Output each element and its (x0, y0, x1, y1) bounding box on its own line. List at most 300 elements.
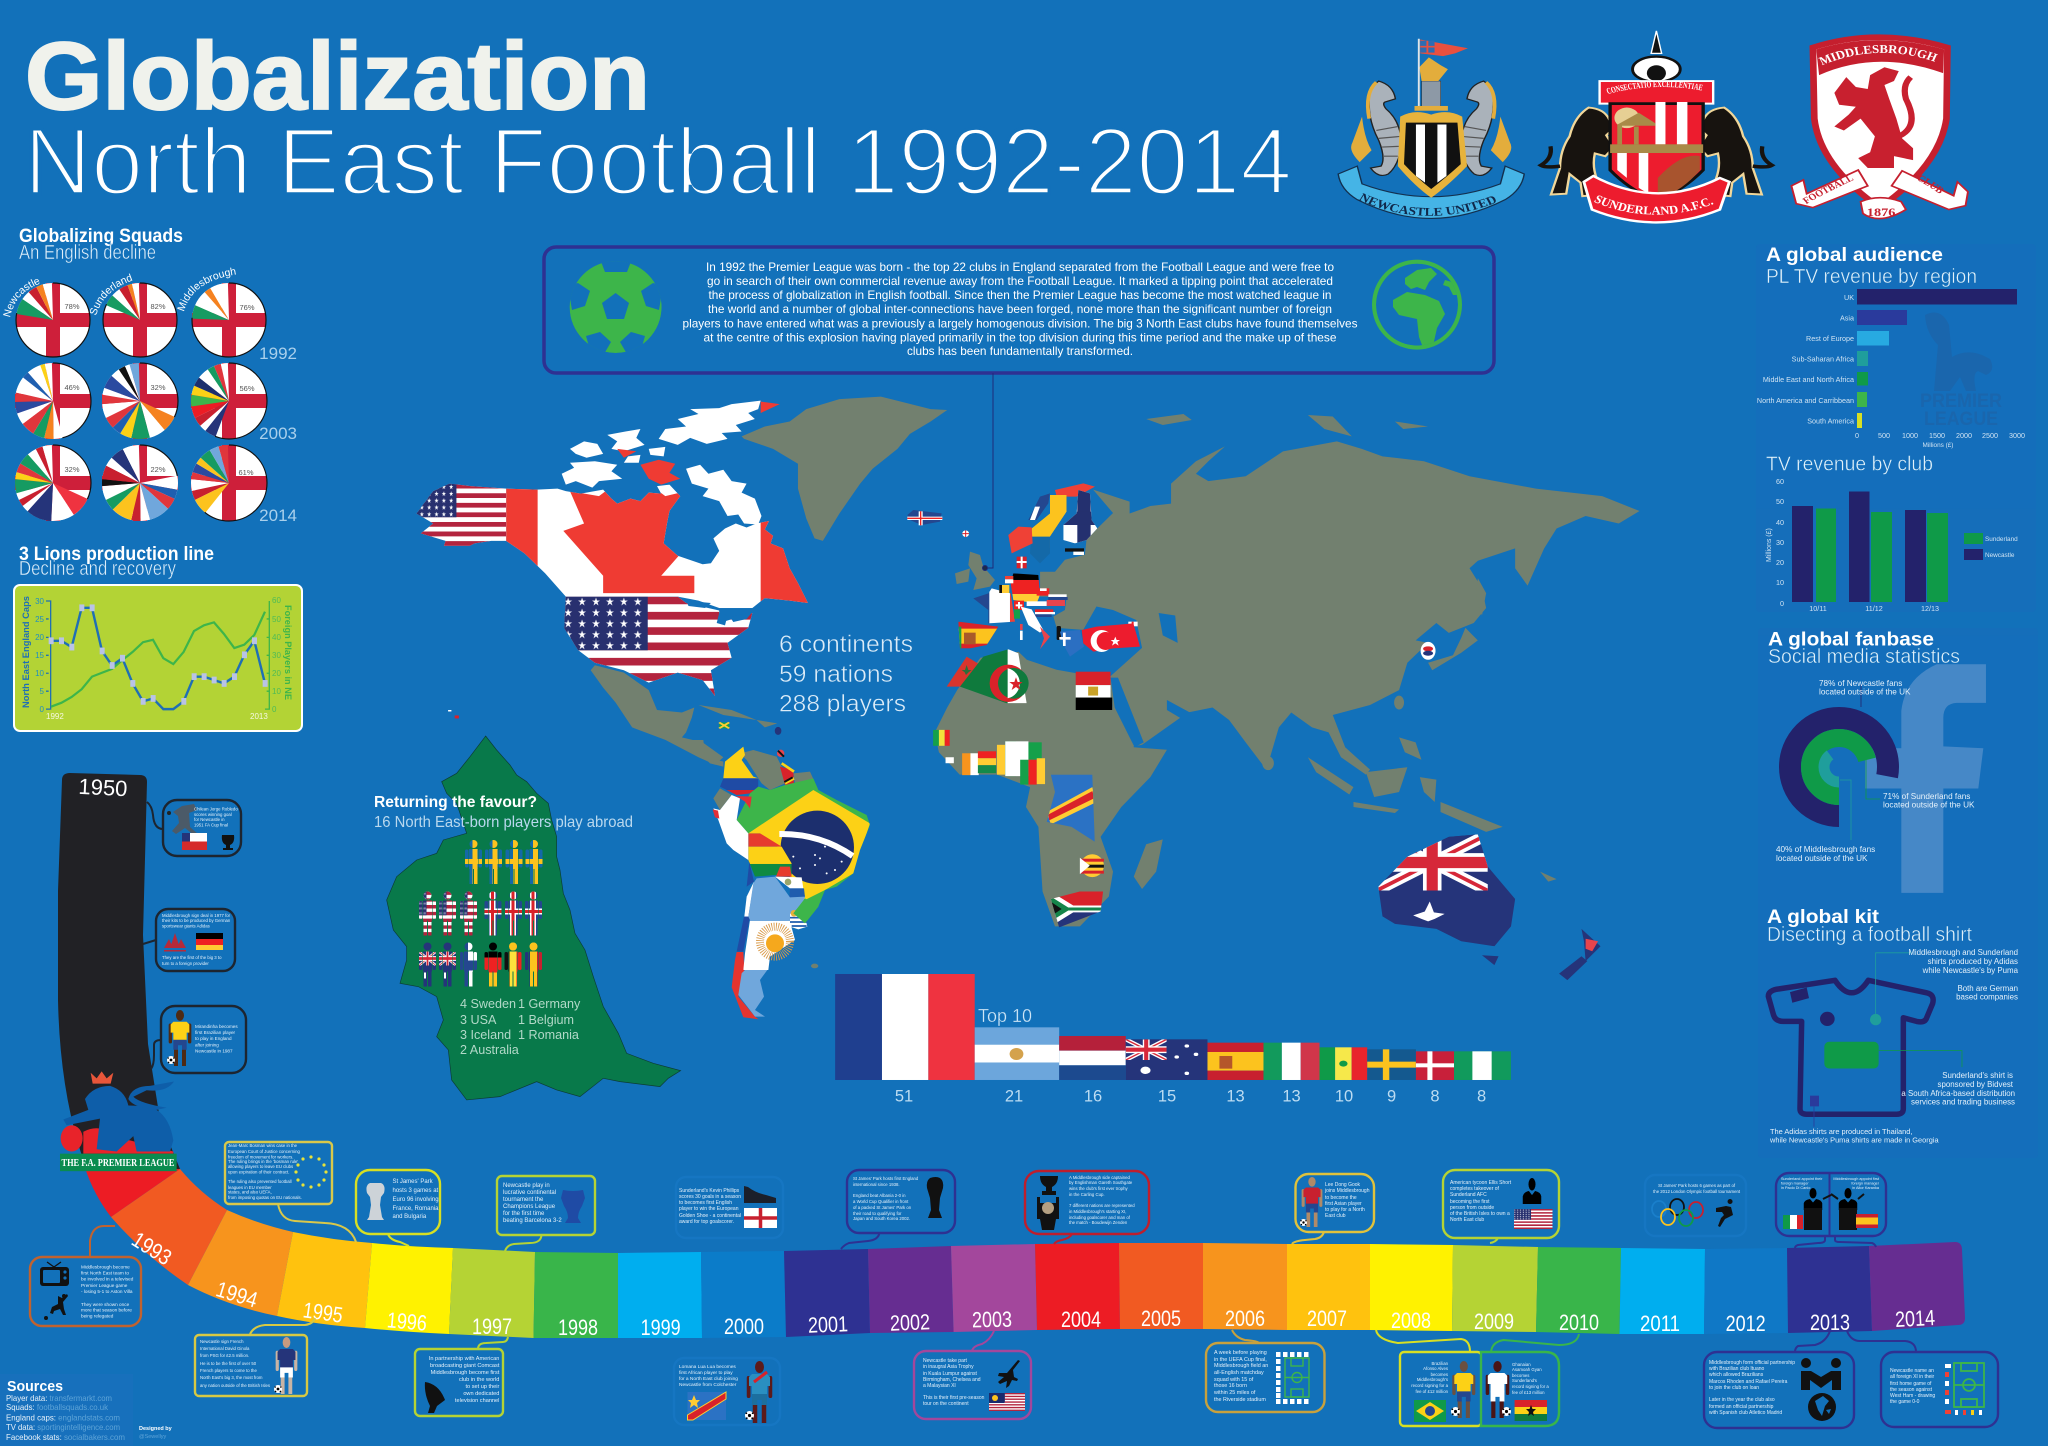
panel: A global kit: while Newcastle's Puma shirts are made in Georgia (1769, 1136, 1939, 1144)
bar chart: TV revenue by region: Sub-Saharan Africa (1792, 354, 1854, 364)
bar chart: TV revenue by region: North America and Carribbean (1757, 396, 1854, 405)
bar chart: TV revenue by club: 30 (1776, 538, 1784, 547)
kit labels: a South Africa-based distribution (1901, 1089, 2015, 1098)
ribbon: year labels: 2013 (1810, 1310, 1850, 1335)
list of countries (460, 997, 581, 1057)
ribbon: coloured year bands (85, 1168, 1965, 1338)
central Europe flags (999, 576, 1138, 657)
chart axis labels: 10 (35, 669, 45, 678)
callout: 1977 Adidas: Middlesbrough sign deal in 1977 for (162, 913, 231, 918)
ribbon: year labels: 1997 (472, 1314, 512, 1339)
kit labels: shirts produced by Adidas (1928, 957, 2018, 966)
callout: Asamoah Gyan: Asamoah Gyan (1512, 1367, 1542, 1372)
panel: 3 Lions production line: 0 (272, 705, 277, 714)
panel: Top 10 countries (835, 974, 1511, 1106)
callout: 1995 Bosman ruling: The ruling also prevented football (228, 1179, 292, 1184)
callout: 1995 Bosman ruling: The ruling brings in the 'bosman rule' (228, 1159, 298, 1164)
kit labels: Sunderland's shirt is (1942, 1071, 2013, 1080)
bar chart: TV revenue by region: 3000 (2009, 431, 2025, 440)
callout: 1993 first televised game: first North East team to (81, 1270, 129, 1275)
callout: Asamoah Gyan: record signing for a (1512, 1384, 1549, 1389)
ribbon: year labels: 2011 (1640, 1311, 1680, 1336)
sources: England caps: englandstats.com (6, 1413, 120, 1423)
panel: Globalizing Squads: An English decline (19, 242, 156, 264)
callout: Kevin Phillips: Sunderland's Kevin Phillips (679, 1188, 740, 1194)
pie: Middlesbrough 1992 (192, 283, 266, 357)
callout: Kevin Phillips: Golden Shoe - a continental (679, 1213, 741, 1219)
list of countries: 2 Australia (460, 1043, 519, 1057)
callout: 2003 Asia Trophy: in inaugral Asia Trophy (923, 1364, 974, 1370)
bar chart: TV revenue by region: Rest of Europe (1806, 334, 1854, 343)
callout: 1993 first televised game: They were shown once (81, 1302, 130, 1307)
ribbon: year labels (78, 774, 1936, 1340)
panel: Returning the favour (374, 736, 681, 1100)
pie: Newcastle 1992: 78% (64, 302, 80, 311)
kit labels: services and trading business (1911, 1098, 2015, 1107)
flag: Egypt (1076, 672, 1112, 710)
callout: Ellis Short: American tycoon Ellis Short (1450, 1180, 1512, 1186)
kit labels: Both are German (1957, 984, 2018, 993)
bar chart: TV revenue by region: 2000 (1956, 431, 1972, 440)
pie: Sunderland 2014: 22% (150, 465, 166, 474)
callout: 1951 Robledo: scores winning goal (194, 812, 232, 817)
panel: A global kit (1767, 907, 2019, 1144)
crest: Newcastle United (1337, 38, 1525, 219)
panel: Top 10 countries: Top 10 (978, 1006, 1032, 1026)
ribbon: year labels: 1995 (301, 1297, 344, 1328)
callout: 1993 first televised game (30, 1226, 141, 1326)
sources: Squads: footballsquads.co.uk (6, 1402, 109, 1412)
callout: 2013 Brazilian and Spanish partnerships: with Spanish club Atletico Madrid (1709, 1410, 1782, 1416)
callout: 2013 foreign managers: Middlesbrough appoint first (1833, 1177, 1880, 1181)
ribbon: year labels: 2008 (1391, 1308, 1431, 1333)
callout: Euro 96: France, Romania (392, 1206, 439, 1212)
callout: Champions League: tournament the (503, 1197, 544, 1203)
ribbon: year labels: 1993 (127, 1227, 176, 1270)
callout: 2013 Brazilian and Spanish partnerships: Later in the year the club also (1709, 1397, 1775, 1403)
callout: 2006 all-English squad: squad with 15 of (1214, 1377, 1254, 1383)
flag: Spain (958, 622, 998, 648)
callout: Asamoah Gyan: Sunderland's (1512, 1378, 1537, 1383)
panel: A global audience: PL TV revenue by region (1766, 266, 1977, 288)
callout: 1977 Adidas: sportswear giants Adidas (162, 924, 210, 928)
donut chart (1790, 718, 1888, 816)
callout: 2003 Asia Trophy: Birmingham, Chelsea and (923, 1377, 981, 1383)
flag values: 51 (895, 1088, 913, 1106)
panel: 3 Lions production line: Decline and recovery (19, 558, 176, 580)
season labels: 2003 (259, 424, 297, 443)
callout: 1993 first televised game: Middlesbrough become (81, 1264, 130, 1269)
callout: Afonso Alves: fee of £12 million (1416, 1389, 1449, 1394)
panel: A global kit: A global kit (1767, 907, 1880, 928)
flag bars (835, 974, 1511, 1080)
flag values: 16 (1084, 1088, 1102, 1106)
callout: Lee Dong Gook: East club (1325, 1213, 1346, 1219)
ribbon: year labels: 1996 (386, 1307, 428, 1336)
flag: Turkey (1082, 624, 1140, 652)
bar chart: TV revenue by region: 1500 (1929, 431, 1945, 440)
crest: Middlesbrough FC: FOOTBALL (1802, 176, 1854, 204)
watermark: Premier League lion (1920, 313, 2002, 430)
callout: 2013 Brazilian and Spanish partnerships (1704, 1331, 1854, 1428)
callout: 2003 Asia Trophy: Newcastle take part (923, 1358, 968, 1364)
callout: 1995 Bosman ruling: states, and also UEFA, (228, 1190, 272, 1194)
bar chart: TV revenue by region: 1000 (1902, 431, 1918, 440)
callout: 2001 St James' Park international: a World Cup Qualifier in front (853, 1199, 909, 1204)
flag: Morocco (947, 657, 983, 687)
donut labels: located outside of the UK (1776, 854, 1868, 863)
callout: Ginola: from PSG for £2.5 million. (200, 1353, 249, 1358)
title: North East Football 1992-2014 (24, 109, 1292, 215)
pie: Middlesbrough 2014 (191, 445, 267, 521)
callout: 1995 Bosman ruling: allowing players to leave EU clubs (228, 1164, 293, 1169)
flag: Peru (713, 795, 752, 860)
sources: TV data: sportingintelligence.com (6, 1422, 120, 1432)
callout: 2013 foreign managers: foreign manager (1851, 1182, 1880, 1186)
list of countries: 3 Iceland (460, 1028, 511, 1042)
ribbon: year labels: 1999 (641, 1315, 681, 1340)
Iceland (907, 510, 969, 537)
club crests (1337, 30, 1969, 224)
callout: Ellis Short (1443, 1170, 1559, 1243)
callout: 2003 Asia Trophy (914, 1331, 1031, 1419)
designer credit: Designed by (139, 1426, 173, 1432)
grey land north (690, 740, 818, 968)
callout: 1977 Adidas: their kits to be produced by German (162, 918, 231, 923)
crest: Middlesbrough FC: 1876 (1867, 205, 1896, 219)
callout: 2014 all-foreign XI: first home game of (1890, 1381, 1932, 1387)
crest: Sunderland AFC: CONSECTATIO EXCELLENTIAE (1606, 82, 1703, 94)
callout: Champions League: beating Barcelona 3-2 (503, 1218, 562, 1224)
callout lines (1840, 684, 1880, 840)
callout: Ginola: International David Ginola (200, 1346, 250, 1351)
ribbon: year labels: 2012 (1726, 1311, 1766, 1336)
flag: France (974, 588, 1015, 624)
callout: 1987 Mirandinha: Newcastle in 1987 (195, 1049, 233, 1054)
callout: Lomana LuaLua: Newcastle from Colchester (679, 1382, 737, 1388)
pie: Sunderland 1992 (103, 283, 177, 357)
ribbon: year labels: 2004 (1061, 1307, 1101, 1332)
ribbon: year labels: 2003 (972, 1307, 1012, 1332)
callout: 2013 Brazilian and Spanish partnerships: Middlesbrough form official partnership (1709, 1360, 1795, 1366)
intro text: go in search of their own commercial revenue away from the Football League. It marked a tipping point that accelerated (707, 275, 1333, 288)
callout: Comcast: Middlesbrough become first (431, 1370, 500, 1376)
icon: football (568, 259, 663, 354)
callout: Ginola: French players to come to the (200, 1368, 257, 1373)
bar chart: TV revenue by club (1766, 477, 2018, 613)
chart axis labels: 15 (35, 651, 45, 660)
callout: Ginola: North East's big 3, the most from (200, 1375, 263, 1380)
callout: 1977 Adidas (143, 909, 235, 971)
callout: 2013 foreign managers: in Aitor Karanka (1852, 1186, 1880, 1190)
callout: 1987 Mirandinha: first Brazilian player (195, 1030, 236, 1035)
callout: 2001 St James' Park international: international since 1938. (853, 1182, 900, 1187)
callout: 2003 Asia Trophy: This is their first pre-season (923, 1395, 985, 1401)
callout: Champions League: Champions League (503, 1204, 556, 1210)
small flags: Africa (933, 730, 1045, 785)
pie: Sunderland 1992: 82% (150, 302, 166, 311)
panel: 3 Lions production line: North East England Caps (21, 596, 31, 708)
chart axis labels: 25 (35, 615, 45, 624)
pie: Newcastle 1992 (16, 283, 90, 357)
callout: Kevin Phillips: scores 30 goals in a season (679, 1194, 741, 1200)
flag: South Africa (1051, 892, 1103, 928)
flags: South America (690, 740, 873, 1019)
callout: 2013 Brazilian and Spanish partnerships: to join the club on loan (1709, 1385, 1759, 1391)
callout: 1987 Mirandinha: to play in England (195, 1036, 232, 1041)
ribbon: year labels: 2007 (1307, 1306, 1347, 1331)
donut labels (1776, 679, 1975, 863)
callout: 2006 all-English squad: all-English matchday (1214, 1370, 1264, 1376)
callout: 2006 all-English squad: the Riverside stadium (1214, 1397, 1266, 1403)
flag: Uruguay (790, 910, 807, 929)
flag values: 15 (1158, 1088, 1176, 1106)
intro text: the process of globalization in English football. Since then the Premier League has become the most watched league in (708, 289, 1332, 302)
crest: Sunderland AFC: SUNDERLAND A.F.C. (1594, 196, 1714, 215)
callout: Comcast: own dedicated (463, 1391, 499, 1397)
bar chart: TV revenue by region: South America (1807, 416, 1854, 426)
flag values: 13 (1226, 1088, 1245, 1106)
callout: 2013 Brazilian and Spanish partnerships: with Brazilian club Ituano (1709, 1366, 1765, 1372)
flag: Paraguay (775, 867, 805, 898)
chart axis labels (35, 597, 45, 714)
list of countries: 4 Sweden (460, 997, 516, 1011)
callout: 2014 all-foreign XI: West Ham - drawing (1890, 1393, 1935, 1399)
panel: A global kit: The Adidas shirts are produced in Thailand, (1770, 1127, 1912, 1136)
logo: F.A. Premier League lion (60, 1071, 177, 1171)
callout: 2004 Carling Cup: including goalscorer and man of (1069, 1215, 1131, 1220)
shirt diagram (1768, 953, 1962, 1127)
bar chart: TV revenue by club: 0 (1780, 599, 1784, 608)
bar chart: TV revenue by region: 2500 (1982, 431, 1998, 440)
flag: Brazil (733, 777, 873, 927)
callout: 2001 St James' Park international: England beat Albania 2-0 in (853, 1193, 906, 1198)
bar chart: TV revenue by club: Newcastle (1985, 552, 2015, 559)
panel: 3 Lions production line: 30 (272, 651, 281, 660)
callout: 2013 foreign managers: in Paolo Di Canio (1781, 1186, 1810, 1190)
pie: Middlesbrough 1992: 76% (239, 303, 255, 312)
panel: 3 Lions production line: 2013 (250, 712, 268, 721)
panel: A global fanbase (1768, 630, 1986, 893)
callout: Lee Dong Gook: to play for a North (1325, 1207, 1365, 1213)
callout: Lee Dong Gook: first Asian player (1325, 1201, 1362, 1207)
great lakes (686, 601, 752, 625)
map statistics (779, 631, 913, 718)
pictogram: players by country (419, 840, 542, 986)
intro text: In 1992 the Premier League was born - the top 22 clubs in England separated from the Football League and were free to (706, 261, 1334, 274)
flag values (895, 1088, 1486, 1106)
bar chart: TV revenue by club: 10 (1776, 578, 1784, 587)
callout: 1987 Mirandinha: Mirandinha becomes (195, 1024, 238, 1029)
timeline ribbon (58, 773, 1965, 1340)
callout: Ellis Short: of the British Isles to own a (1450, 1211, 1510, 1217)
Nordic flags (1008, 483, 1100, 568)
callout: 1951 Robledo: 1951 FA Cup final (194, 822, 228, 828)
callout: 1951 Robledo: Chilean Jorge Robledo (194, 806, 238, 811)
callout: 2006 all-English squad: Middlesbrough field an (1214, 1363, 1268, 1369)
flag: Algeria (958, 647, 1029, 705)
callout: 2014 all-foreign XI (1847, 1331, 1998, 1427)
callout: Ellis Short: completes takeover of (1450, 1186, 1500, 1192)
pie: Middlesbrough 2003 (191, 363, 267, 439)
flag: Alaska USA (412, 484, 512, 546)
callout: 2013 foreign managers (1776, 1173, 1886, 1248)
list of countries: 1 Belgium (518, 1013, 574, 1027)
season labels: 2014 (259, 506, 297, 525)
line chart (46, 601, 269, 709)
pie: Newcastle 2003: 46% (64, 383, 80, 392)
flag values: 13 (1282, 1088, 1301, 1106)
logo: F.A. Premier League lion: THE F.A. PREMIER LEAGUE (62, 1158, 175, 1169)
ribbon: year labels: 2014 (1894, 1305, 1936, 1332)
flag: Australia (1378, 834, 1515, 946)
bar chart: TV revenue by region: Millions (£) (1923, 442, 1953, 449)
callout: 1993 first televised game: being relegated (81, 1314, 114, 1319)
callout: 2004 Carling Cup: in the Carling Cup. (1069, 1192, 1105, 1197)
callout: 1987 Mirandinha: after joining (195, 1042, 219, 1048)
panel: A global kit: Disecting a football shirt (1767, 924, 1972, 946)
callout: Champions League: for the first time (503, 1211, 545, 1217)
watermark: Facebook f (1865, 664, 1986, 893)
callout: 2014 all-foreign XI: Newcastle name an (1890, 1368, 1934, 1374)
callout: 1987 Mirandinha (151, 1006, 246, 1073)
callout: Euro 96: Euro 96 involving (392, 1197, 439, 1203)
callout: Afonso Alves (1376, 1330, 1481, 1426)
flag: DR Congo (1046, 774, 1095, 842)
bar chart: TV revenue by region: UK (1844, 293, 1854, 302)
callout: 1995 Bosman ruling: Jean-Marc Bosman wins case in the (228, 1143, 298, 1148)
callout: 1977 Adidas: turn to a foreign provider (162, 961, 209, 966)
callout: Afonso Alves: Afonso Alves (1423, 1366, 1448, 1371)
callout: Afonso Alves: Brazilian (1432, 1361, 1449, 1366)
kit labels (1901, 948, 2019, 1107)
ribbon: year labels: 1998 (558, 1315, 598, 1340)
callout: 2004 Carling Cup: A Middlesbrough side captained (1069, 1175, 1131, 1180)
callout: Afonso Alves: record signing for a (1411, 1383, 1449, 1388)
callout: 1993 first televised game: - losing 5-1 to Aston Villa (81, 1289, 133, 1294)
panel: 3 Lions production line: 50 (272, 615, 281, 624)
callout: Ginola (195, 1318, 315, 1396)
chart axis labels: 20 (35, 633, 45, 642)
callout: Lomana LuaLua: Lomana Lua Lua becomes (679, 1364, 736, 1370)
callout: Champions League: lucrative continental (503, 1190, 556, 1196)
callout: 2003 Asia Trophy: in Kuala Lumpur against (923, 1371, 978, 1377)
callout: Asamoah Gyan: becomes (1512, 1373, 1529, 1378)
callout: 2013 foreign managers: Sunderland appoint their (1781, 1177, 1823, 1181)
callout: 2014 all-foreign XI: the game 0-0 (1890, 1399, 1920, 1405)
callout: Kevin Phillips: player to win the European (679, 1206, 739, 1212)
callout: 1977 Adidas: They are the first of the big 3 to (162, 955, 222, 960)
callout: 2012 Olympics: St James' Park hosts 6 games as part of (1658, 1183, 1736, 1188)
bar chart: TV revenue by club: 12/13 (1921, 604, 1939, 613)
ribbon: year labels: 2002 (890, 1309, 930, 1336)
callout: 2013 Brazilian and Spanish partnerships: which allowed Brazilians (1709, 1372, 1764, 1378)
title (24, 23, 1292, 215)
icon: globe (1372, 260, 1462, 353)
panel: Globalizing Squads: Globalizing Squads (19, 226, 183, 247)
callout: 2004 Carling Cup: in Middlesbrough's starting XI, (1069, 1209, 1126, 1214)
kit labels: sponsored by Bidvest (1938, 1080, 2014, 1089)
panel: Globalizing Squads (3, 226, 297, 525)
sources (0, 1374, 173, 1446)
callout: 1995 Bosman ruling: from imposing quotas on EU nationals. (228, 1195, 302, 1200)
callout: Ginola: any nation outside of the British Isles (200, 1383, 270, 1388)
watermark: Premier League lion: LEAGUE (1924, 409, 1998, 430)
crest: Middlesbrough FC (1790, 34, 1969, 220)
callout: 2006 all-English squad: in the UEFA Cup final, (1214, 1357, 1267, 1363)
club labels: Sunderland (90, 274, 132, 315)
callout: 2006 all-English squad (1206, 1330, 1324, 1412)
pie: Sunderland 2003: 32% (150, 383, 166, 392)
callout: 2012 Olympics (1645, 1175, 1746, 1236)
pie: Newcastle 2014 (15, 445, 91, 521)
callout: Lee Dong Gook: joins Middlesbrough (1324, 1188, 1370, 1194)
callout: 2001 St James' Park international: St James' Park hosts first England (853, 1176, 919, 1181)
callout: Comcast: television channel (455, 1398, 499, 1404)
panel: A global fanbase: Social media statistics (1768, 646, 1960, 668)
callout: 2001 St James' Park international (841, 1170, 955, 1249)
crest: Sunderland AFC (1537, 30, 1812, 224)
flag values: 10 (1335, 1088, 1353, 1106)
seas (1111, 613, 1192, 747)
callout: Ellis Short: person from outside (1450, 1205, 1494, 1211)
pie: Middlesbrough 2003: 56% (239, 384, 255, 393)
panel: 3 Lions production line: 60 (272, 596, 281, 605)
flag: Zimbabwe (1080, 854, 1104, 877)
bar chart: TV revenue by club: Sunderland (1985, 536, 2018, 543)
bar chart: TV revenue by club: 40 (1776, 518, 1784, 527)
pie: Newcastle 2014: 32% (64, 465, 80, 474)
map statistics: 6 continents (779, 631, 913, 658)
flag: Chile (732, 862, 758, 1019)
callout: Afonso Alves: Middlesbrough's (1417, 1377, 1448, 1382)
donut labels: located outside of the UK (1883, 800, 1975, 810)
bar chart: TV revenue by region: Middle East and North Africa (1763, 375, 1854, 384)
ribbon: 1950 black section (58, 773, 180, 1173)
callout: 2006 all-English squad: A week before playing (1214, 1350, 1267, 1356)
sources: Facebook stats: socialbakers.com (6, 1432, 125, 1442)
intro text: clubs has been fundamentally transformed. (907, 345, 1133, 358)
callout: 2001 St James' Park international: of a packed St James' Park on (853, 1205, 912, 1210)
callout: 1995 Bosman ruling: leagues in EU member (228, 1185, 272, 1190)
flag: Bolivia (748, 833, 792, 876)
season labels (259, 344, 297, 525)
ribbon: year labels: 2001 (808, 1311, 848, 1338)
chart axis labels: 30 (35, 597, 45, 606)
panel: Returning the favour: 16 North East-born players play abroad (374, 814, 633, 831)
callout: Ellis Short: North East club (1450, 1217, 1484, 1223)
intro panel (544, 247, 1494, 373)
callout: 1995 Bosman ruling: upon expiration of their contract. (228, 1169, 289, 1174)
flag values: 8 (1430, 1088, 1440, 1106)
kit labels: while Newcastle's by Puma (1922, 966, 2019, 975)
chart axis labels: 0 (40, 705, 45, 714)
callout: 2014 all-foreign XI: the season against (1890, 1387, 1933, 1393)
callout: Asamoah Gyan: fee of £13 million (1512, 1390, 1545, 1395)
callout: Kevin Phillips: award for top goalscorer. (679, 1219, 734, 1225)
panel: A global audience: A global audience (1766, 245, 1943, 266)
callout: Kevin Phillips: to becomes first English (679, 1200, 732, 1206)
donut labels: 40% of Middlesbrough fans (1776, 845, 1875, 854)
season labels: 1992 (259, 344, 297, 363)
callout: Comcast: In partnership with American (429, 1356, 499, 1362)
callout: 2013 Brazilian and Spanish partnerships: formed an official partnership (1709, 1404, 1774, 1410)
flag: South Korea (1421, 642, 1436, 660)
callout: 2006 all-English squad: within 25 miles of (1213, 1390, 1256, 1396)
kit labels: Middlesbrough and Sunderland (1908, 948, 2018, 957)
callout: 2006 all-English squad: those 16 born (1214, 1383, 1247, 1389)
callout: Champions League: Newcastle play in (503, 1183, 550, 1189)
